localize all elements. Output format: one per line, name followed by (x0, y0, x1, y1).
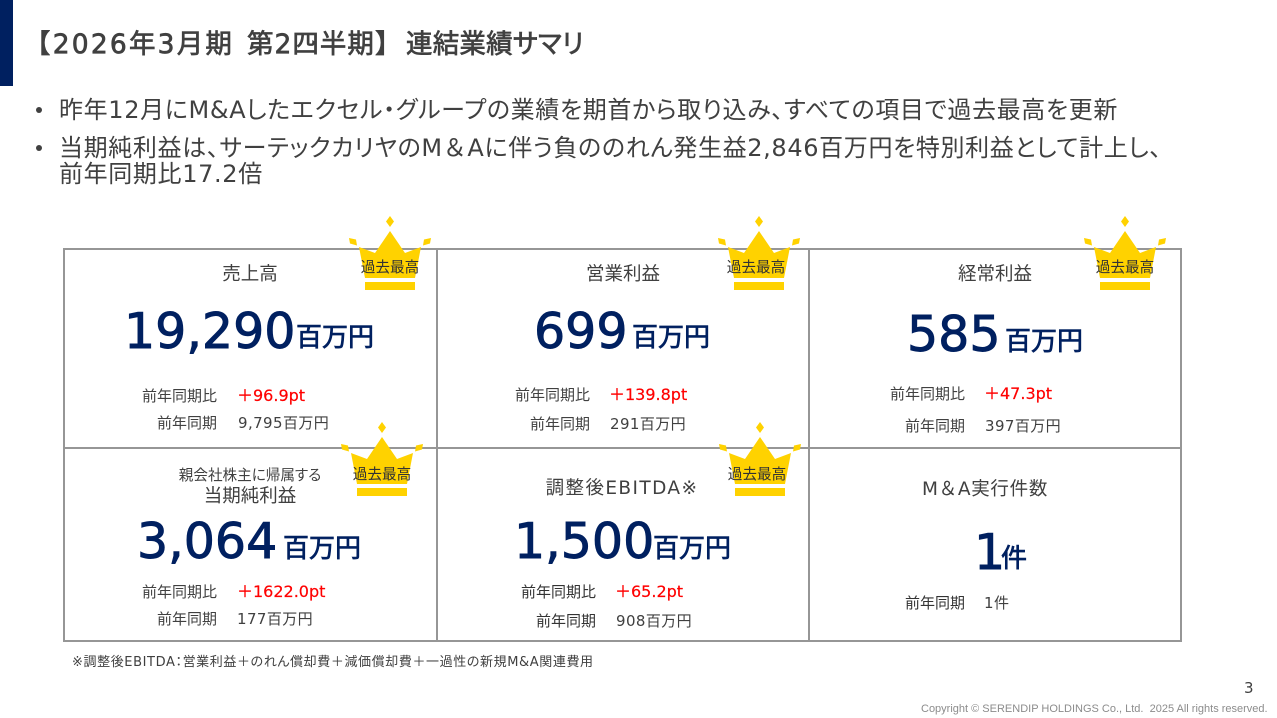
accent bar (0, 0, 13, 86)
card title: M＆A実行件数 (922, 479, 1048, 500)
icon: crown 当期純利益 (341, 422, 423, 496)
title: 第2四半期】 (247, 29, 402, 60)
icon: crown 経常利益 (1084, 216, 1166, 290)
label prior: 前年同期 (905, 594, 965, 612)
card title: 営業利益 (586, 264, 660, 285)
panel: 経常利益 (890, 264, 1083, 435)
value prior: 1件 (984, 594, 1009, 612)
label yoy: 前年同期比 (142, 387, 217, 405)
value prior: 397百万円 (985, 417, 1061, 435)
panel: 営業利益 (515, 264, 710, 433)
unit: 百万円 (653, 528, 731, 565)
unit: 百万円 (283, 528, 361, 565)
card title: 経常利益 (958, 264, 1032, 285)
icon: crown 調整後EBITDA (719, 422, 801, 496)
label yoy: 前年同期比 (515, 386, 590, 404)
value yoy: ＋96.9pt (237, 386, 305, 405)
title (24, 29, 584, 60)
label prior: 前年同期 (905, 417, 965, 435)
results grid frame (63, 248, 1182, 642)
card title: 売上高 (222, 264, 278, 285)
card subtitle: 親会社株主に帰属する (179, 467, 321, 484)
unit: 百万円 (632, 317, 710, 354)
title: 連結業績サマリ (406, 29, 584, 60)
unit: 件 (1001, 538, 1027, 575)
bullet text block (36, 96, 1162, 188)
value: 1,500 (514, 513, 654, 570)
icon: crown 経常利益: 過去最高 (1096, 256, 1154, 277)
unit: 百万円 (296, 317, 374, 354)
value: 1 (974, 524, 1005, 581)
bullet marker 2 (36, 145, 42, 151)
panel: 当期純利益 (137, 467, 361, 628)
value: 19,290 (124, 303, 295, 360)
page number: 3 (1244, 679, 1254, 697)
value: 585 (907, 306, 1001, 363)
value yoy: ＋65.2pt (615, 582, 683, 601)
icon: crown 営業利益 (718, 216, 800, 290)
value yoy: ＋1622.0pt (237, 582, 325, 601)
value prior: 9,795百万円 (238, 414, 329, 432)
title: 【2026年3月期 (24, 29, 234, 60)
card title: 調整後EBITDA※ (546, 478, 698, 499)
copyright: Copyright © SERENDIP HOLDINGS Co., Ltd. 2025 All rights reserved. (921, 703, 1268, 715)
unit: 百万円 (1005, 321, 1083, 358)
footnote: ※調整後EBITDA：営業利益＋のれん償却費＋減価償却費＋一過性の新規M&A関連費用 (72, 655, 594, 670)
panel: M&A実行件数 (905, 479, 1048, 612)
value prior: 908百万円 (616, 612, 692, 630)
value: 699 (534, 303, 628, 360)
value yoy: ＋139.8pt (609, 385, 687, 404)
value: 3,064 (137, 513, 277, 570)
label prior: 前年同期 (157, 414, 217, 432)
icon: crown 営業利益: 過去最高 (727, 256, 785, 277)
bullet 2 line 2: 前年同期比17.2倍 (59, 160, 263, 188)
panel: 調整後EBITDA (514, 478, 731, 630)
value prior: 291百万円 (610, 415, 686, 433)
card title: 当期純利益 (204, 486, 296, 507)
icon: crown 調整後EBITDA: 過去最高 (728, 463, 786, 484)
label prior: 前年同期 (536, 612, 596, 630)
icon: crown 売上高: 過去最高 (361, 256, 419, 277)
panel: 売上高 (124, 264, 374, 432)
bullet marker 1 (36, 107, 42, 113)
bullet 2 line 1: 当期純利益は、サーテックカリヤのM＆Aに伴う負ののれん発生益2,846百万円を特別利益として計上し、 (59, 134, 1162, 162)
label yoy: 前年同期比 (521, 583, 596, 601)
value yoy: ＋47.3pt (984, 384, 1052, 403)
label yoy: 前年同期比 (142, 583, 217, 601)
icon: crown 売上高 (349, 216, 431, 290)
bullet 1: 昨年12月にM&Aしたエクセル・グループの業績を期首から取り込み、すべての項目で過去最高を更新 (59, 96, 1118, 124)
label prior: 前年同期 (530, 415, 590, 433)
value prior: 177百万円 (237, 610, 313, 628)
label prior: 前年同期 (157, 610, 217, 628)
label yoy: 前年同期比 (890, 385, 965, 403)
icon: crown 当期純利益: 過去最高 (353, 463, 411, 484)
